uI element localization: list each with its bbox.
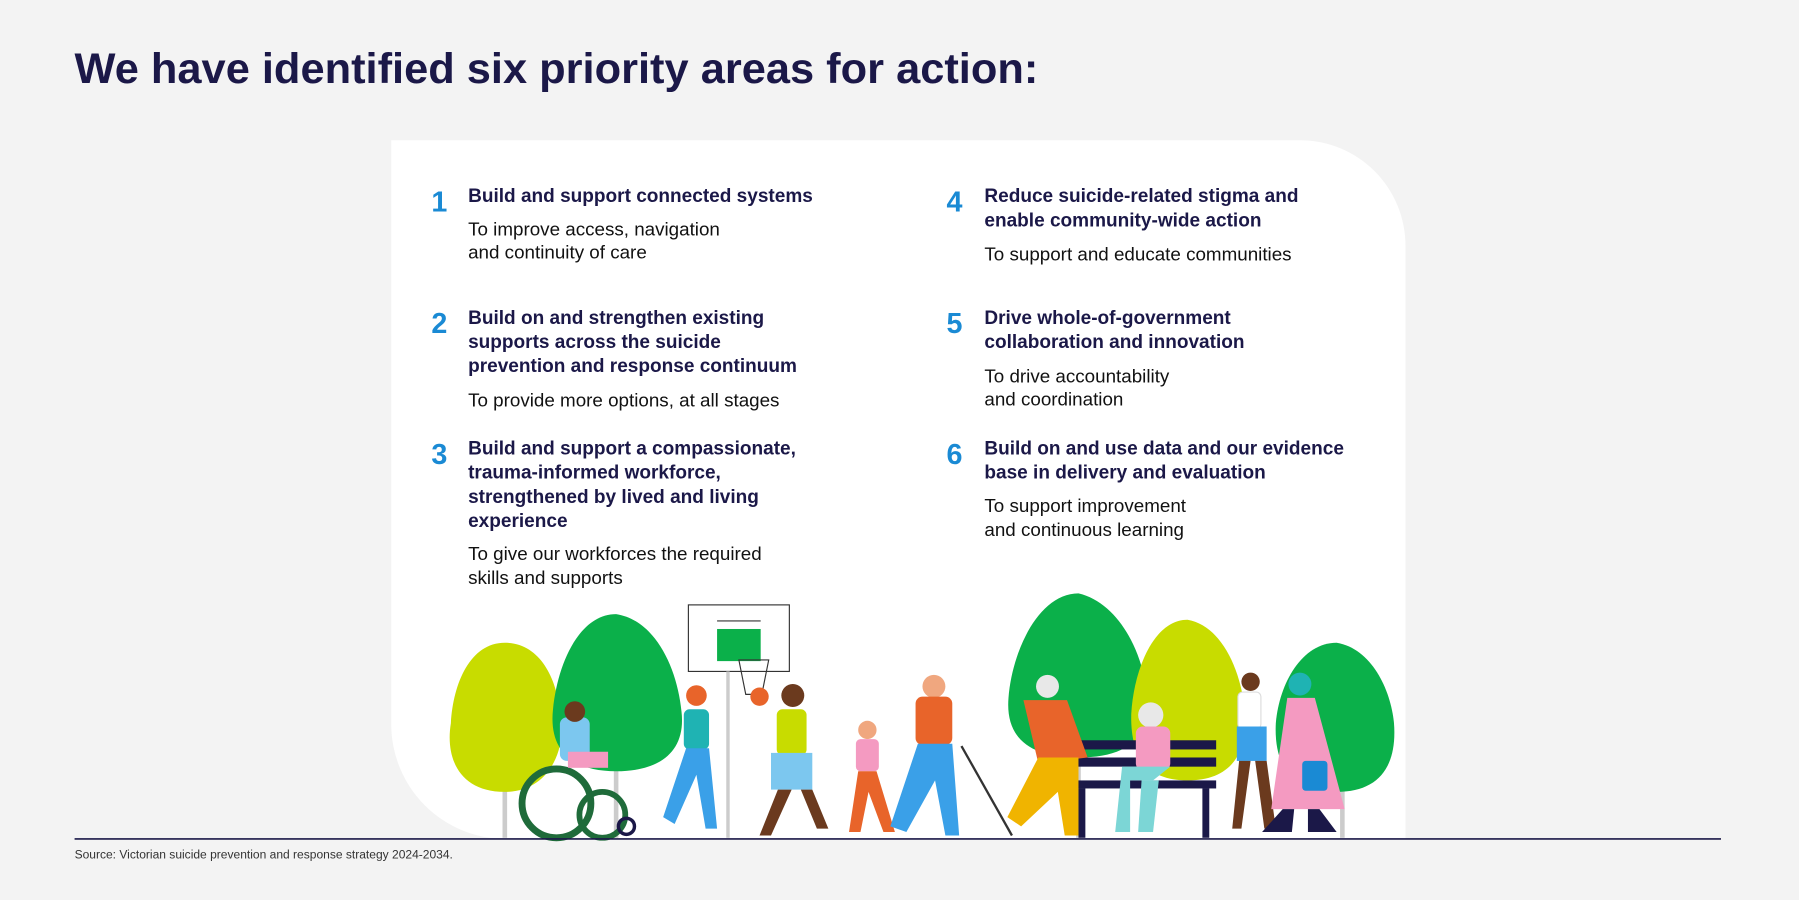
baseline: [75, 838, 1721, 840]
illustration: park with people: [450, 593, 1394, 838]
item 2: [431, 308, 797, 410]
item 3: experience: [468, 511, 568, 532]
person: older man: [1007, 675, 1088, 836]
item 1: To improve access, navigation: [468, 218, 720, 239]
item 5: To drive accountability: [984, 365, 1170, 386]
person: child: [849, 721, 895, 832]
item 3: To give our workforces the required: [468, 543, 762, 564]
item 4: enable community-wide action: [984, 210, 1261, 231]
item 5: collaboration and innovation: [984, 332, 1245, 353]
item 6: and continuous learning: [984, 519, 1184, 540]
item 4: To support and educate communities: [984, 244, 1292, 265]
item 6: [947, 439, 1344, 540]
person: woman with ponytail: [663, 685, 717, 829]
person: man with cane: [890, 675, 1012, 836]
item 3: 3: [431, 439, 447, 471]
person: young person: [1232, 673, 1276, 829]
item 5: [947, 308, 1245, 409]
item 2: prevention and response continuum: [468, 356, 797, 377]
item 2: 2: [431, 308, 447, 340]
item 5: Drive whole-of-government: [984, 308, 1231, 329]
person: seated woman: [1115, 702, 1170, 832]
item 4: [947, 186, 1299, 265]
item 6: 6: [947, 439, 962, 471]
tree: green far right: [1276, 643, 1394, 838]
tree: green left: [552, 614, 682, 838]
item 6: To support improvement: [984, 495, 1187, 516]
source note: Source: Victorian suicide prevention and response strategy 2024-2034.: [75, 847, 453, 861]
person: wheelchair user: [522, 701, 634, 838]
item 6: Build on and use data and our evidence: [984, 439, 1344, 460]
panel: priority areas: [391, 140, 1405, 839]
item 4: 4: [947, 186, 963, 218]
tree: green right: [1008, 593, 1147, 838]
item 4: Reduce suicide-related stigma and: [984, 186, 1299, 207]
item 5: and coordination: [984, 388, 1123, 409]
tree: lime right: [1131, 620, 1245, 780]
item 5: 5: [947, 308, 963, 340]
item 1: and continuity of care: [468, 241, 647, 262]
item 2: Build on and strengthen existing: [468, 308, 764, 329]
item 1: [431, 186, 813, 262]
item 3: trauma-informed workforce,: [468, 463, 721, 484]
item 3: [431, 439, 796, 588]
title: We have identified six priority areas for action:: [75, 45, 1038, 92]
item 3: Build and support a compassionate,: [468, 439, 796, 460]
item 3: strengthened by lived and living: [468, 487, 759, 508]
item 1: Build and support connected systems: [468, 186, 813, 207]
tree: lime left: [450, 643, 562, 838]
basketball hoop: [688, 605, 789, 838]
item 2: To provide more options, at all stages: [468, 389, 779, 410]
item 6: base in delivery and evaluation: [984, 463, 1266, 484]
item 2: supports across the suicide: [468, 332, 721, 353]
person: woman in pink dress: [1262, 673, 1345, 832]
bench: [1073, 740, 1216, 838]
item 3: skills and supports: [468, 567, 623, 588]
item 1: 1: [431, 186, 447, 218]
person: basketball player: [760, 684, 828, 836]
